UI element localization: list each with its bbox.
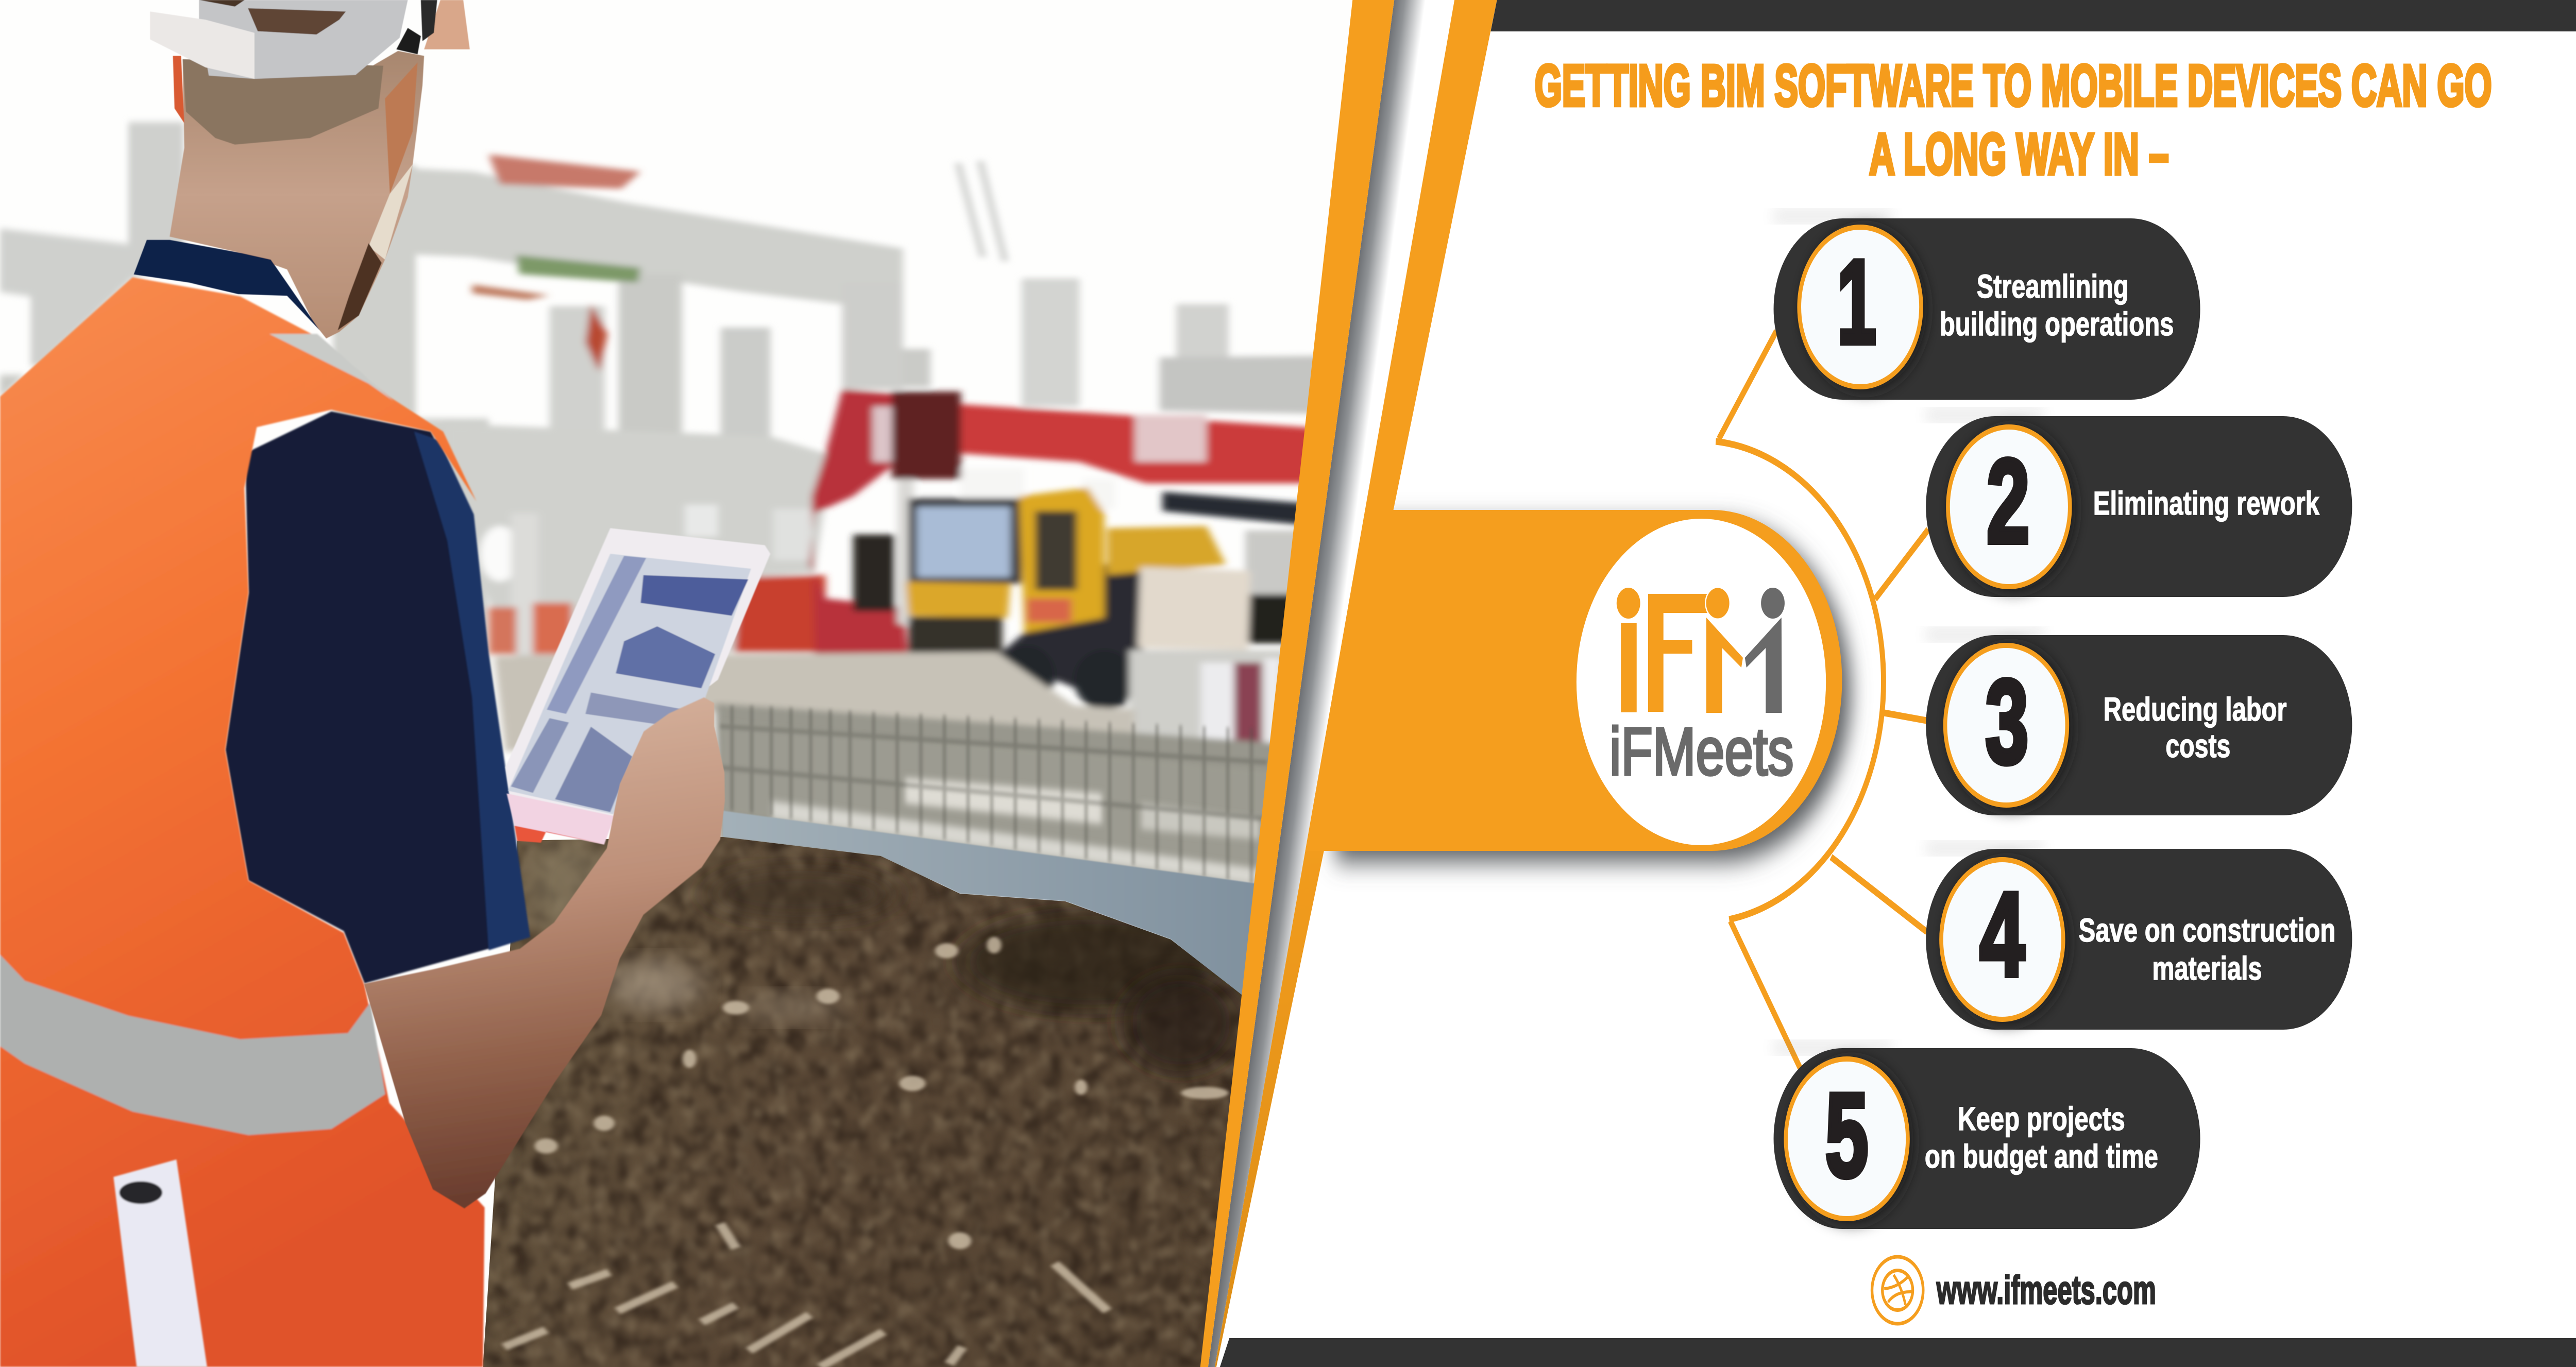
item 1: Streamlining [1977, 268, 2129, 305]
photo: site background with crane and truck [389, 155, 1378, 880]
item 3 [1926, 629, 2352, 815]
item 5: Keep projects [1958, 1101, 2125, 1138]
item 2 [1926, 410, 2352, 597]
diagonal stripes [1200, 0, 1497, 1367]
photo: fence [720, 706, 1279, 887]
item 2: Eliminating rework [2093, 485, 2319, 522]
band shadow [1335, 522, 1851, 862]
website address: www.ifmeets.com [1936, 1267, 2156, 1312]
item 4: Save on construction [2079, 912, 2335, 949]
item 5: on budget and time [1925, 1138, 2158, 1175]
stripe shadow [1208, 0, 1454, 1367]
item 5: 5 [1825, 1068, 1869, 1202]
item 4 [1926, 843, 2352, 1030]
photo: fence light blobs [771, 778, 1271, 887]
item 1 [1774, 211, 2200, 400]
photo: navy shirt [225, 412, 530, 983]
bottom bar [1220, 1338, 2576, 1367]
white content panel [1216, 0, 2576, 1367]
photo: tablet showing drawings [505, 528, 770, 824]
item 3: Reducing labor [2104, 691, 2287, 728]
top bar [1490, 0, 2576, 31]
photo: fence bars [720, 706, 1267, 884]
item 5 [1774, 1043, 2200, 1229]
left orange stripe [1200, 0, 1394, 1367]
orange band [1306, 510, 1842, 851]
logo band with capsule end [1306, 510, 1851, 862]
title: A LONG WAY IN – [1869, 122, 2168, 187]
item 1: 1 [1837, 235, 1876, 368]
logo white disc [1577, 519, 1826, 845]
photo: engineer reading a tablet on a construction site [0, 0, 1378, 1367]
photo: orange safety vest [0, 277, 485, 1367]
icon: website ball [1872, 1257, 1923, 1324]
title [1535, 54, 2492, 187]
item 1: building operations [1940, 306, 2174, 343]
item 3: costs [2165, 728, 2230, 765]
item 2: 2 [1987, 434, 2030, 568]
logo mark: iFM figures [1617, 587, 1785, 713]
connector lines and arc [1716, 331, 1928, 1068]
item 4: materials [2152, 950, 2262, 987]
photo: paper roll in pocket [113, 1159, 207, 1367]
item 3: 3 [1985, 655, 2029, 788]
photo: blue-grey retaining wall [723, 811, 1267, 1002]
right orange stripe [1215, 0, 1497, 1367]
photo: left concrete structure [0, 119, 494, 679]
photo: arm and hand [364, 697, 725, 1208]
logo: iFMeets [1577, 519, 1826, 845]
item 4: 4 [1979, 867, 2025, 1001]
photo: man's head and helmet [134, 0, 470, 338]
logo wordmark: iFMeets [1609, 713, 1794, 789]
photo: tablet bottom edge [506, 793, 615, 845]
photo: soil [480, 834, 1251, 1367]
